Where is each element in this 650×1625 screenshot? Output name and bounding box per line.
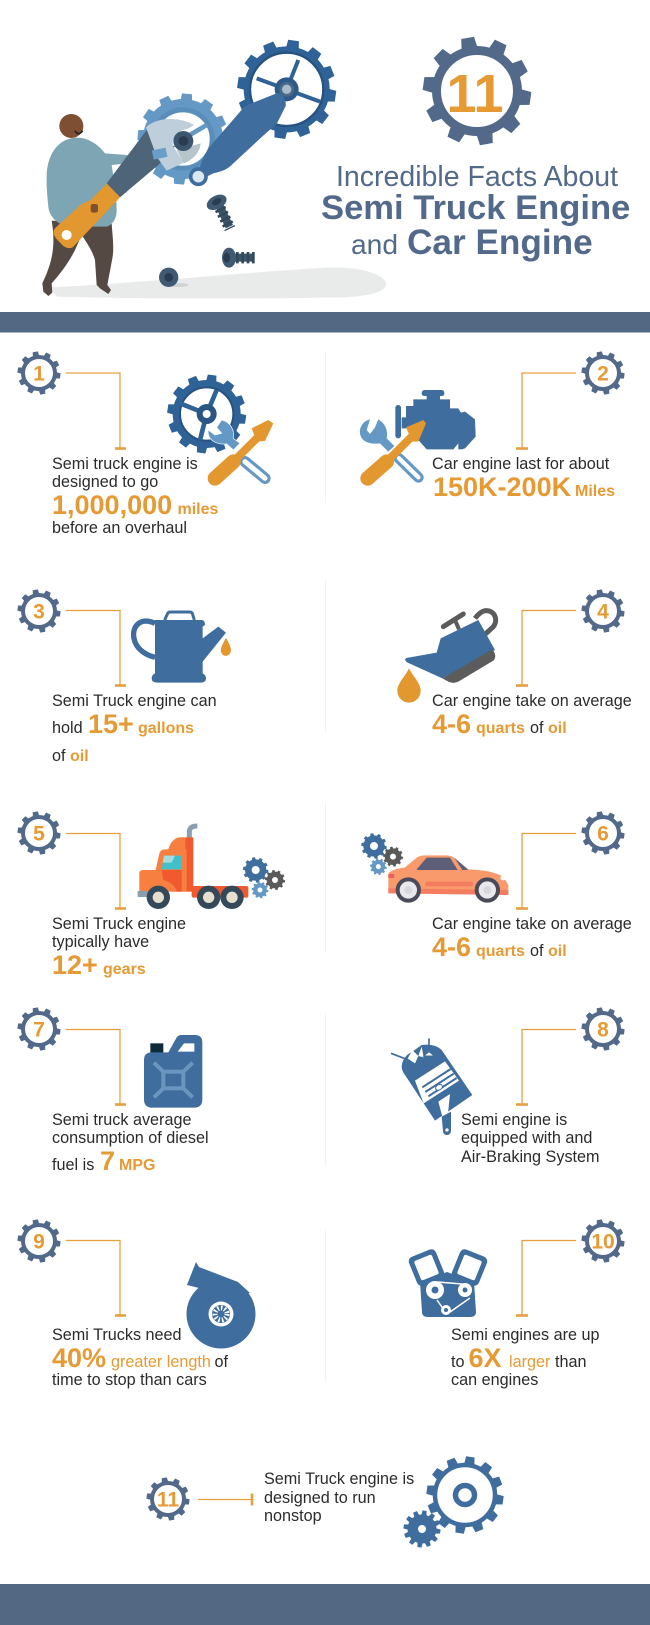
connector 3 bbox=[66, 610, 120, 685]
fact 10: than bbox=[555, 1353, 587, 1371]
fact 3: of bbox=[52, 747, 66, 765]
title gear with number 11: 11 bbox=[446, 64, 504, 124]
connector 9 bbox=[66, 1240, 120, 1315]
icon: gear with wrench and screwdriver bbox=[162, 370, 273, 478]
badge 10 bbox=[578, 1216, 628, 1266]
title: and bbox=[351, 228, 398, 260]
badge 2 bbox=[578, 348, 628, 398]
fact 1: before an overhaul bbox=[52, 519, 187, 537]
light blue gear bbox=[134, 90, 232, 188]
fact 5: typically have bbox=[52, 933, 149, 951]
fact 10: to bbox=[451, 1353, 465, 1371]
fact 4: quarts bbox=[476, 720, 525, 737]
fact 1: 1,000,000 bbox=[52, 490, 172, 520]
fact 3: 15+ bbox=[88, 709, 134, 739]
man head bbox=[59, 114, 83, 138]
badge 2: 2 bbox=[597, 362, 609, 386]
badge 8 bbox=[578, 1004, 628, 1054]
connector 2 bbox=[522, 373, 576, 448]
badge 4 bbox=[578, 586, 628, 636]
fact 9: greater length bbox=[111, 1353, 211, 1371]
man hand bbox=[127, 154, 134, 161]
fact 9: of bbox=[214, 1353, 229, 1371]
icon: tilted oil can bbox=[397, 611, 496, 703]
fact 3: oil bbox=[70, 748, 89, 765]
text 9: Semi Trucks need bbox=[52, 1326, 182, 1344]
fact 8: Air-Braking System bbox=[461, 1148, 600, 1166]
badge 5: 5 bbox=[33, 822, 45, 846]
icon: two gears bbox=[401, 1452, 508, 1550]
fact 9: 40% bbox=[52, 1343, 106, 1373]
fact 1 bbox=[14, 348, 273, 537]
icon: turbocharger bbox=[186, 1262, 256, 1348]
fact 7: fuel is bbox=[52, 1156, 94, 1174]
badge 3: 3 bbox=[33, 600, 45, 624]
badge 9 bbox=[14, 1216, 64, 1266]
connector 1 bbox=[66, 373, 120, 448]
fact 5: 12+ bbox=[52, 950, 98, 980]
title: Car Engine bbox=[407, 223, 593, 262]
badge 7: 7 bbox=[33, 1018, 45, 1042]
badge 11: 11 bbox=[157, 1488, 179, 1512]
text 2: Car engine last for about bbox=[432, 455, 610, 473]
text 11: Semi Truck engine is bbox=[264, 1470, 414, 1488]
text 6: Car engine take on average bbox=[432, 915, 632, 933]
icon: jerry can bbox=[144, 1035, 202, 1108]
wrench bbox=[53, 119, 201, 248]
title: Incredible Facts About bbox=[336, 161, 618, 193]
fact 10: larger bbox=[509, 1353, 551, 1371]
badge 4: 4 bbox=[597, 600, 609, 624]
text 3: Semi Truck engine can bbox=[52, 692, 217, 710]
dark blue gear bbox=[231, 34, 342, 145]
icon: V engine bbox=[407, 1248, 489, 1317]
fact 10 bbox=[407, 1216, 628, 1389]
screw two bbox=[222, 248, 255, 268]
text 10: Semi engines are up bbox=[451, 1326, 599, 1344]
badge 6: 6 bbox=[597, 822, 609, 846]
fact 8: equipped with and bbox=[461, 1129, 592, 1147]
title gear with number 11 bbox=[414, 28, 540, 154]
fact 9 bbox=[14, 1216, 256, 1389]
fact 5 bbox=[14, 808, 287, 980]
fact 1: miles bbox=[178, 501, 219, 518]
text 4: Car engine take on average bbox=[432, 692, 632, 710]
fact 11: nonstop bbox=[264, 1507, 322, 1525]
fact 7 bbox=[14, 1004, 209, 1176]
badge 6 bbox=[578, 808, 628, 858]
fact 6: 4-6 bbox=[432, 932, 471, 962]
blue lever arm bbox=[191, 93, 286, 184]
connector 7 bbox=[66, 1030, 120, 1104]
ground shadow bbox=[50, 267, 386, 299]
connector 4 bbox=[522, 610, 576, 685]
man body bbox=[47, 138, 128, 227]
badge 9: 9 bbox=[33, 1230, 45, 1254]
icon: engine with tools bbox=[360, 390, 476, 478]
text 5: Semi Truck engine bbox=[52, 915, 186, 933]
fact 7: 7 bbox=[100, 1146, 115, 1176]
fact 10: 6X bbox=[468, 1343, 502, 1373]
fact 8 bbox=[391, 1004, 628, 1166]
fact 3: gallons bbox=[138, 720, 194, 737]
fact 6 bbox=[359, 808, 632, 962]
badge 1: 1 bbox=[33, 362, 45, 386]
connector 10 bbox=[522, 1240, 576, 1315]
fact 6: of bbox=[530, 942, 544, 960]
fact 11: designed to run bbox=[264, 1489, 376, 1507]
connector 11 bbox=[198, 1498, 252, 1500]
connector 5 bbox=[66, 834, 120, 908]
icon: semi truck with gears bbox=[138, 826, 287, 909]
fact 2: Miles bbox=[575, 483, 615, 500]
fact 11 bbox=[143, 1452, 508, 1550]
fact 3: hold bbox=[52, 719, 83, 737]
badge 8: 8 bbox=[597, 1018, 609, 1042]
title: Semi Truck Engine bbox=[321, 189, 630, 227]
man legs bbox=[42, 221, 113, 296]
title bbox=[321, 161, 630, 262]
badge 1 bbox=[14, 348, 64, 398]
icon: oil watering can bbox=[134, 612, 231, 683]
top band bbox=[0, 312, 650, 332]
loose nut bbox=[159, 268, 188, 287]
text 1: Semi truck engine is bbox=[52, 455, 198, 473]
connector 8 bbox=[522, 1030, 576, 1104]
hero illustration: man turning gears with wrench bbox=[42, 34, 386, 299]
icon: car with gears bbox=[359, 831, 508, 903]
fact 7: consumption of diesel bbox=[52, 1129, 209, 1147]
fact 4 bbox=[397, 586, 632, 739]
text 7: Semi truck average bbox=[52, 1111, 191, 1129]
fact 10: can engines bbox=[451, 1371, 538, 1389]
connector 6 bbox=[522, 834, 576, 908]
fact 4: of bbox=[530, 719, 544, 737]
fact 4: 4-6 bbox=[432, 709, 471, 739]
column dividers bbox=[324, 352, 326, 1381]
fact 6: quarts bbox=[476, 943, 525, 960]
badge 7 bbox=[14, 1004, 64, 1054]
icon: piston bbox=[391, 1038, 472, 1135]
badge 5 bbox=[14, 808, 64, 858]
badge 10: 10 bbox=[591, 1230, 615, 1254]
fact 5: gears bbox=[103, 961, 146, 978]
fact 3 bbox=[14, 586, 231, 765]
fact 2: 150K-200K bbox=[433, 472, 571, 502]
fact 1: designed to go bbox=[52, 473, 158, 491]
fact 7: MPG bbox=[119, 1157, 155, 1174]
screw one bbox=[204, 191, 230, 229]
badge 11 bbox=[143, 1474, 193, 1524]
fact 6: oil bbox=[548, 943, 567, 960]
fact 2 bbox=[360, 348, 628, 502]
badge 3 bbox=[14, 586, 64, 636]
text 8: Semi engine is bbox=[461, 1111, 567, 1129]
bottom band bbox=[0, 1584, 650, 1625]
fact 9: time to stop than cars bbox=[52, 1371, 207, 1389]
fact 4: oil bbox=[548, 720, 567, 737]
